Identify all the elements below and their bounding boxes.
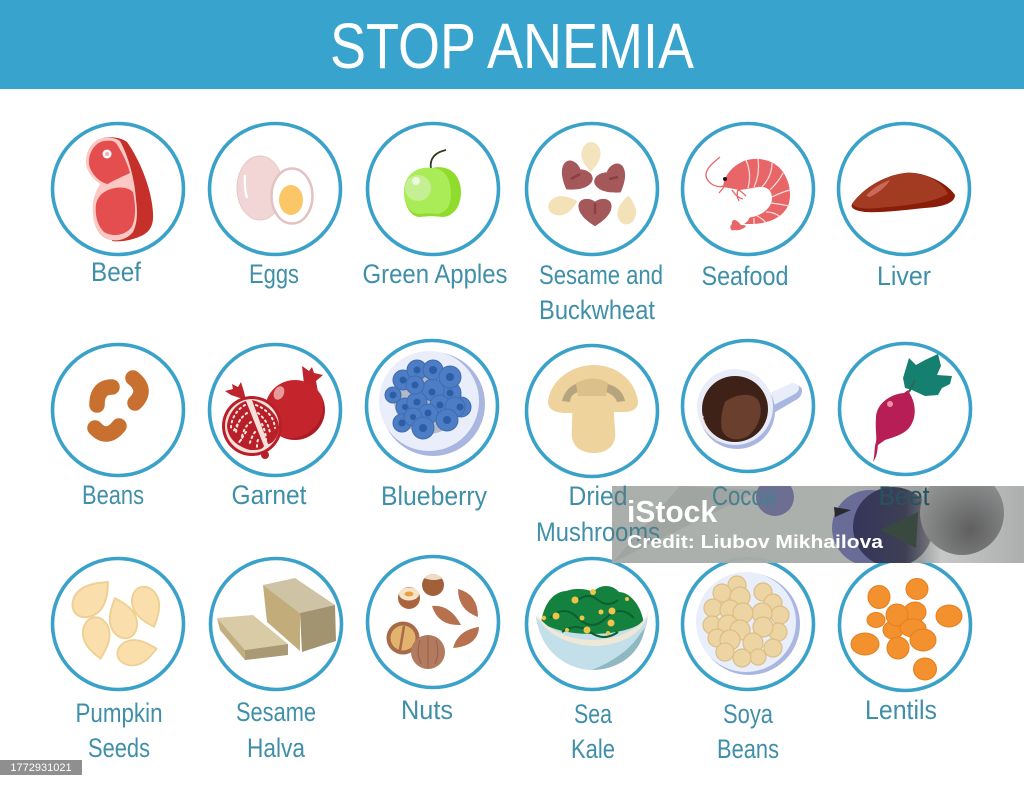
watermark	[612, 486, 1024, 563]
item: Nuts	[368, 556, 498, 725]
label: Dried Mushrooms: Dried	[568, 481, 628, 511]
image id tag	[0, 760, 82, 775]
label: Soya Beans: Soya	[723, 699, 774, 729]
item: Blueberry	[366, 340, 498, 511]
item: Green Apples	[362, 124, 508, 289]
title: STOP ANEMIA	[330, 10, 694, 82]
label: Soya Beans: Beans	[717, 734, 779, 764]
item: Seafood	[682, 124, 814, 291]
label: Lentils: Lentils	[865, 695, 937, 725]
label: Soya Beans	[717, 699, 779, 764]
item: Beef	[52, 124, 184, 287]
item: Eggs	[210, 124, 340, 289]
watermarked labels showing through: Cocoa	[712, 481, 777, 511]
item: Soya Beans	[682, 558, 814, 764]
label: Sea Kale: Kale	[571, 734, 615, 764]
item: Beans	[52, 344, 184, 510]
watermark text: iStock: iStock	[627, 494, 718, 529]
label: Sea Kale: Sea	[574, 699, 613, 729]
item: Sea Kale	[526, 558, 658, 764]
image id tag: 1772931021	[10, 762, 72, 774]
label: Beef: Beef	[91, 257, 141, 287]
label: Sesame and Buckwheat: Sesame and	[539, 260, 663, 290]
watermarked labels showing through: Beet	[878, 481, 930, 511]
label: Beans: Beans	[82, 480, 144, 510]
item: Sesame Halva	[210, 558, 342, 763]
label: Sesame and Buckwheat	[539, 260, 663, 325]
item: Garnet	[210, 344, 340, 510]
label: Pumpkin Seeds: Seeds	[88, 733, 150, 763]
item: Dried Mushrooms	[526, 346, 660, 547]
label: Beet: Beet	[878, 481, 930, 511]
label: Sesame Halva: Halva	[247, 733, 306, 763]
label: Blueberry: Blueberry	[381, 481, 487, 511]
label: Green Apples: Green Apples	[362, 259, 508, 289]
label: Sesame Halva	[236, 697, 316, 763]
item: Sesame and Buckwheat	[526, 124, 663, 325]
label: Garnet: Garnet	[232, 480, 307, 510]
label: Pumpkin Seeds	[76, 698, 162, 763]
header banner	[0, 0, 1024, 89]
item: Liver	[838, 124, 970, 291]
label: Sesame and Buckwheat: Buckwheat	[539, 295, 655, 325]
watermarked labels showing through: Mushrooms	[536, 517, 660, 547]
label: Dried Mushrooms: Mushrooms	[536, 517, 660, 547]
label: Cocoa: Cocoa	[712, 481, 777, 511]
label: Nuts: Nuts	[401, 695, 453, 725]
item: Pumpkin Seeds	[52, 558, 184, 763]
watermarked labels showing through: Dried	[568, 481, 628, 511]
watermarked labels showing through	[612, 486, 930, 542]
label: Dried Mushrooms	[536, 481, 660, 547]
label: Eggs: Eggs	[249, 259, 299, 289]
watermark credit: Credit: Liubov Mikhailova	[627, 531, 884, 552]
item: Cocoa	[682, 340, 814, 511]
item: Beet	[840, 344, 970, 511]
item: Lentils	[840, 560, 970, 725]
label: Liver: Liver	[877, 261, 931, 291]
label: Pumpkin Seeds: Pumpkin	[76, 698, 162, 728]
label: Sea Kale	[571, 699, 615, 764]
label: Sesame Halva: Sesame	[236, 697, 316, 727]
label: Seafood: Seafood	[702, 261, 788, 291]
